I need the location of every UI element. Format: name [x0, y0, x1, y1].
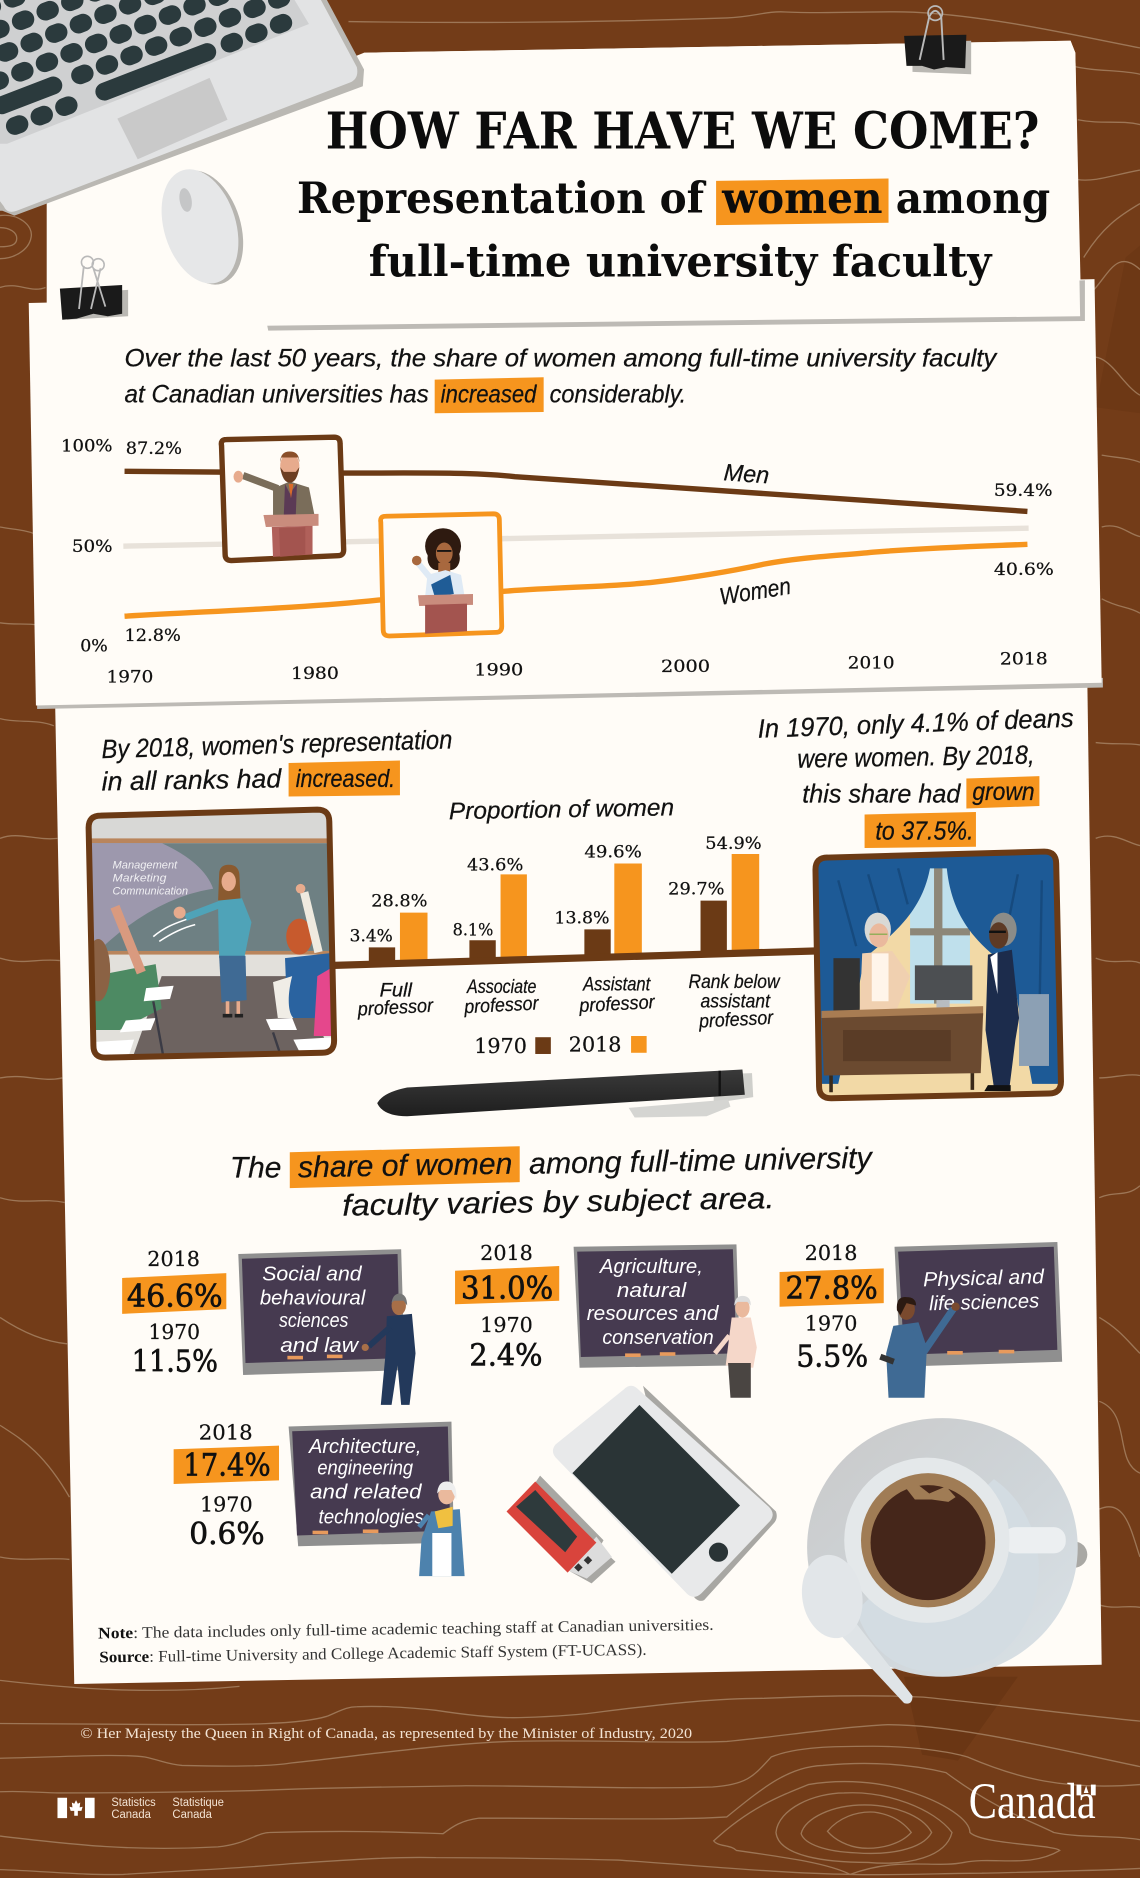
legend — [474, 1033, 647, 1058]
text: deans note: In 1970, only 4.1% of deans — [757, 703, 1074, 744]
bar value labels: 43.6% — [467, 855, 523, 875]
title: full-time university faculty — [369, 238, 993, 288]
chalkboard: and related — [310, 1481, 422, 1503]
chalkboard — [895, 1242, 1062, 1367]
category labels: Associate — [466, 977, 536, 998]
category labels: professor — [356, 996, 435, 1021]
chalkboard: and law — [280, 1335, 359, 1357]
subject: physical and life sciences: 5.5% — [796, 1340, 868, 1375]
subject section heading: share of women — [298, 1148, 513, 1184]
subject: architecture, engineering and related technologies: 17.4% — [183, 1448, 271, 1484]
illustration: classroom: Management — [113, 859, 178, 871]
chalkboard — [289, 1422, 454, 1546]
text: ranks note: increased. — [296, 765, 395, 793]
value labels: 87.2% — [126, 438, 182, 458]
text: ranks note: By 2018, women's representation — [101, 724, 453, 764]
highlight: women — [716, 178, 889, 225]
title: HOW FAR HAVE WE COME? — [326, 102, 1039, 161]
subject: physical and life sciences: 1970 — [805, 1312, 857, 1336]
paper: chart sheet — [29, 279, 1103, 709]
man — [984, 913, 1049, 1091]
presenter — [419, 1481, 465, 1576]
bar value labels: 49.6% — [584, 842, 642, 862]
x axis years: 2018 — [1000, 649, 1048, 669]
x axis years: 2010 — [848, 652, 895, 672]
intro text: at Canadian universities has — [125, 380, 429, 408]
desk — [821, 1006, 983, 1092]
chalkboard: technologies — [319, 1506, 424, 1528]
subject section heading: The — [230, 1151, 281, 1184]
category labels: professor — [463, 993, 541, 1018]
subject: agriculture, natural resources and conservation: 31.0% — [461, 1270, 553, 1306]
bar value labels: 3.4% — [350, 925, 393, 945]
category labels: professor — [698, 1008, 775, 1033]
highlight: to 37.5% — [865, 812, 976, 848]
subject: social and behavioural sciences and law: 1970 — [148, 1320, 200, 1344]
subject: physical and life sciences — [780, 1241, 1062, 1398]
line chart — [61, 436, 1054, 687]
x axis years — [107, 649, 1048, 687]
subject: agriculture, natural resources and conservation: 2018 — [480, 1241, 533, 1265]
subject: agriculture, natural resources and conservation: 1970 — [480, 1313, 533, 1337]
text: deans note: to 37.5%. — [875, 816, 974, 846]
icon: pen — [377, 1070, 753, 1117]
icon: computer mouse — [148, 160, 256, 294]
value labels: 12.8% — [125, 625, 181, 645]
subject: agriculture, natural resources and conservation: 2.4% — [469, 1338, 542, 1373]
chalkboard: behavioural — [260, 1287, 366, 1309]
value labels — [125, 438, 1054, 645]
illustration: dean's office — [808, 844, 1072, 1108]
chart heading: Proportion of women — [449, 794, 674, 825]
students and desks — [86, 884, 339, 1056]
line: women — [125, 544, 1027, 616]
text: deans note: this share had — [802, 778, 962, 808]
y axis labels: 50% — [72, 536, 113, 556]
title — [297, 102, 1050, 288]
y axis labels: 100% — [61, 436, 113, 456]
intro text — [125, 344, 998, 413]
category labels: Full — [380, 980, 413, 1001]
highlight: increased — [289, 761, 400, 796]
icon: smartphone — [553, 1386, 777, 1601]
x axis years: 1980 — [291, 663, 339, 683]
bar value labels: 13.8% — [554, 907, 610, 927]
x axis years: 1970 — [107, 667, 153, 687]
bars: 2018 — [400, 854, 759, 962]
legend: 2018 — [569, 1033, 621, 1057]
intro text: Over the last 50 years, the share of women among full-time university faculty — [125, 344, 998, 372]
copyright: © Her Majesty the Queen in Right of Canada, as represented by the Minister of Industry, 2020 — [80, 1726, 692, 1742]
text: deans note: grown — [972, 778, 1035, 806]
x axis years: 2000 — [661, 656, 710, 676]
subject: social and behavioural sciences and law: 46.6% — [127, 1279, 223, 1315]
series label women: Women — [718, 573, 793, 611]
category labels: Rank below — [689, 972, 781, 993]
chalkboard: resources and — [587, 1303, 719, 1325]
category labels — [356, 972, 781, 1033]
subject: architecture, engineering and related technologies: 0.6% — [189, 1517, 265, 1552]
subject: social and behavioural sciences and law: 2018 — [147, 1247, 200, 1271]
logo: Statistics Canada: Canada — [111, 1807, 151, 1821]
presenter — [362, 1294, 416, 1405]
chalkboard: engineering — [317, 1457, 414, 1479]
bars: 1970 — [369, 901, 727, 963]
note and source: Source: Full-time University and College Academic Staff System (FT-UCASS). — [99, 1642, 647, 1666]
icon: binder clip top — [904, 6, 971, 74]
subject section heading — [230, 1142, 874, 1223]
value labels: 59.4% — [994, 480, 1053, 500]
icon: binder clip left — [60, 256, 128, 320]
chalkboard: natural — [617, 1280, 687, 1302]
category labels: Assistant — [582, 974, 651, 996]
paper: lower sheet — [55, 680, 1102, 1684]
chalkboard: conservation — [602, 1327, 714, 1349]
subject: social and behavioural sciences and law: 11.5% — [132, 1344, 218, 1379]
series label men: Men — [723, 459, 770, 489]
highlight: increased — [435, 377, 544, 413]
subject: social and behavioural sciences and law — [122, 1247, 416, 1405]
line: men — [125, 471, 1027, 511]
logo: Statistics Canada — [57, 1795, 224, 1821]
value labels: 40.6% — [994, 559, 1054, 579]
logo: Statistics Canada: Statistique — [172, 1795, 224, 1809]
icon: USB drive — [507, 1476, 616, 1583]
logo: Canada wordmark: Canada — [969, 1773, 1096, 1829]
bar value labels: 54.9% — [705, 833, 762, 853]
x axis years: 1990 — [474, 660, 523, 680]
subject section heading: faculty varies by subject area. — [342, 1182, 775, 1223]
icon: laptop — [0, 0, 364, 216]
text: deans note — [757, 703, 1074, 848]
panel: male professor at podium — [221, 437, 344, 561]
note and source — [98, 1617, 714, 1666]
subject: agriculture, natural resources and conservation — [455, 1241, 757, 1398]
bar chart — [334, 833, 814, 1058]
chalkboard — [238, 1249, 405, 1375]
chalkboard: Physical and — [923, 1266, 1045, 1291]
subject: architecture, engineering and related technologies — [174, 1421, 465, 1576]
text: deans note: were women. By 2018, — [797, 740, 1035, 774]
chalkboard — [574, 1244, 740, 1368]
y axis labels: 0% — [80, 636, 108, 656]
subject: architecture, engineering and related technologies: 2018 — [199, 1421, 253, 1445]
presenter — [879, 1297, 960, 1398]
title: among — [896, 174, 1050, 224]
note and source: Note: The data includes only full-time academic teaching staff at Canadian universities. — [98, 1617, 714, 1642]
presenter — [715, 1296, 757, 1398]
category labels: professor — [578, 992, 657, 1017]
woman — [860, 913, 910, 1012]
title: women — [721, 174, 883, 224]
chalkboard: sciences — [279, 1310, 348, 1332]
chalkboard: life sciences — [929, 1290, 1040, 1315]
bar value labels: 28.8% — [371, 891, 428, 911]
legend: 1970 — [474, 1034, 527, 1058]
illustration: classroom: Marketing — [113, 873, 166, 885]
subject: physical and life sciences: 27.8% — [786, 1270, 878, 1306]
paper: back sheet — [47, 41, 1081, 362]
teacher — [174, 865, 251, 1016]
subject section heading: among full-time university — [529, 1142, 874, 1181]
text: ranks note: in all ranks had — [101, 763, 283, 796]
paper: title sheet — [262, 41, 1085, 331]
logo: Statistics Canada: Statistics — [111, 1795, 156, 1809]
logo: Statistics Canada: Canada — [172, 1807, 212, 1821]
text: ranks note — [101, 724, 453, 796]
highlight: share of women — [290, 1146, 520, 1188]
highlight: grown — [966, 776, 1039, 808]
bar value labels: 29.7% — [668, 879, 724, 899]
subject: physical and life sciences: 2018 — [805, 1241, 857, 1265]
bar value labels: 8.1% — [453, 919, 493, 939]
bar value labels — [350, 833, 762, 945]
title: Representation of — [297, 174, 706, 224]
panel: female professor at podium — [381, 514, 502, 636]
subject: architecture, engineering and related technologies: 1970 — [200, 1493, 253, 1517]
y axis labels — [61, 436, 113, 656]
category labels: assistant — [701, 991, 771, 1012]
chalkboard: Social and — [262, 1263, 362, 1285]
icon: coffee cup with saucer and spoon — [795, 1418, 1087, 1704]
intro text: considerably. — [550, 380, 686, 408]
chalkboard: Agriculture, — [599, 1256, 703, 1278]
intro text: increased — [441, 380, 537, 408]
monitor — [915, 965, 972, 1011]
chalkboard: Architecture, — [308, 1436, 422, 1458]
illustration: classroom — [84, 802, 341, 1066]
illustration: classroom: Communication — [113, 886, 188, 898]
